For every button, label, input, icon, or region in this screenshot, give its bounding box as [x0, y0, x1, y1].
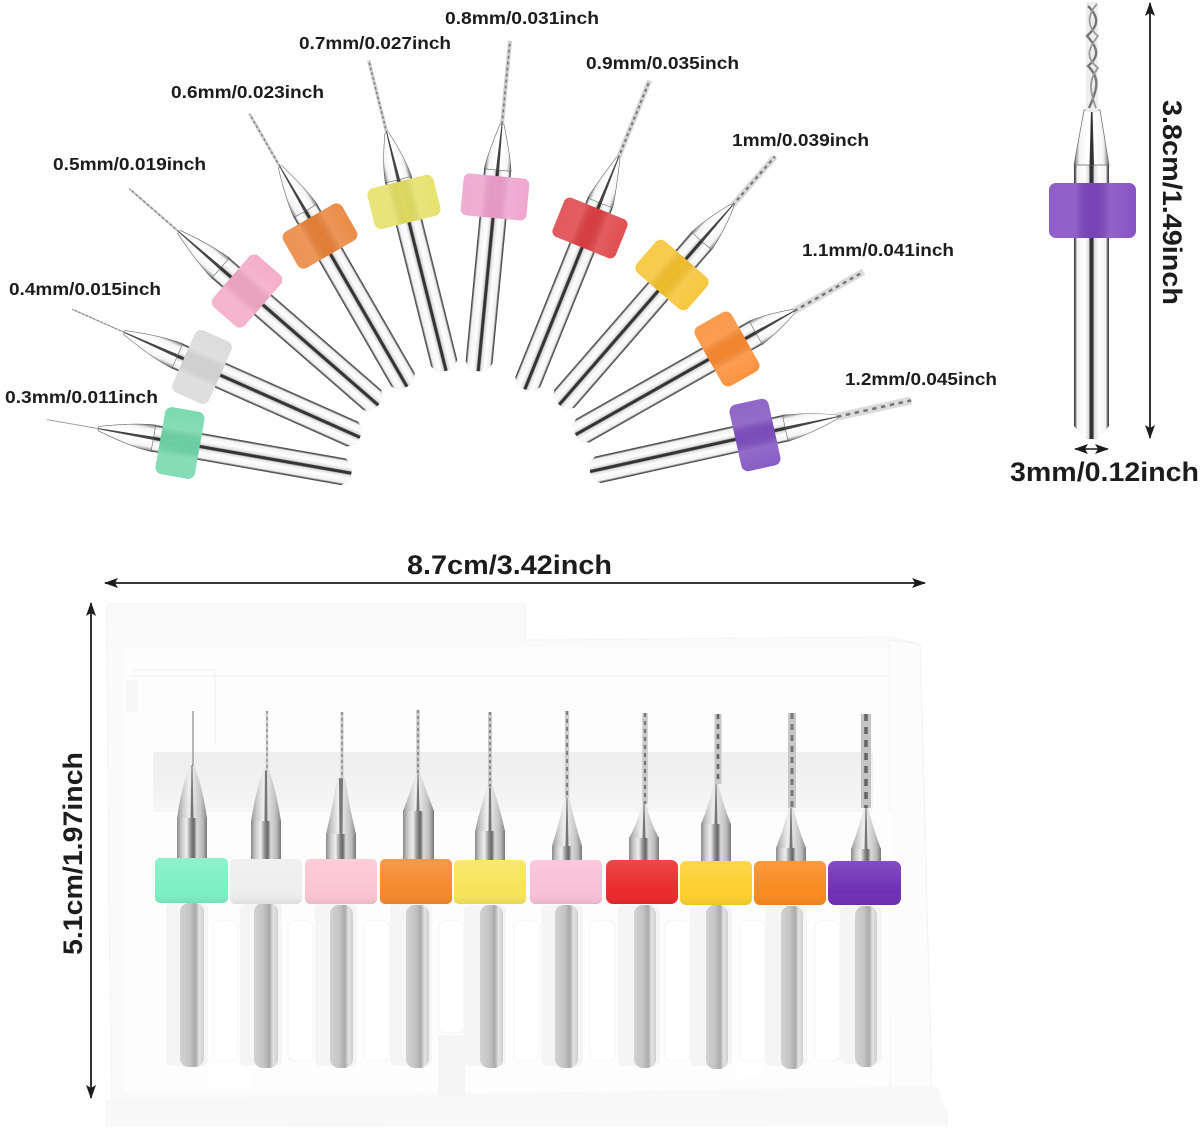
label 0.5mm: 0.5mm/0.019inch	[53, 154, 206, 174]
drill bit 0.3mm mint	[41, 386, 357, 507]
drill bit 0.6mm orange	[220, 97, 436, 404]
dimension arrow: drill length	[1149, 3, 1151, 438]
case drill orange	[380, 710, 452, 1068]
dimension label: case height: 5.1cm/1.97inch	[58, 752, 88, 955]
large purple drill bit	[1049, 2, 1136, 439]
case drill yellow	[454, 712, 526, 1068]
drill bit 1mm yellow	[533, 134, 801, 427]
label 0.8mm: 0.8mm/0.031inch	[445, 8, 599, 28]
drills held in the case	[155, 710, 901, 1069]
case drill pink two	[530, 711, 602, 1068]
drill bit 0.8mm pink	[445, 38, 543, 374]
drill bit 1.2mm purple	[583, 367, 919, 505]
fan of ten drill bits	[41, 38, 919, 507]
drill bit 1.1mm orange	[559, 242, 880, 464]
dimension arrow: shank diameter	[1075, 448, 1108, 450]
dimension arrow: case height	[90, 603, 92, 1098]
case drill mint	[155, 711, 228, 1067]
case drill orange two	[754, 713, 826, 1069]
drill bit 0.4mm white	[58, 278, 374, 468]
dimension arrow: case width	[105, 582, 925, 584]
case drill pink	[305, 712, 377, 1068]
dimension label: drill length: 3.8cm/1.49inch	[1157, 100, 1187, 305]
label 0.7mm: 0.7mm/0.027inch	[299, 33, 451, 53]
size labels for the fan	[5, 8, 997, 407]
drill bit 0.5mm pink	[107, 163, 401, 431]
label 1.2mm: 1.2mm/0.045inch	[845, 369, 997, 389]
dimension label: case width: 8.7cm/3.42inch	[407, 550, 612, 580]
case drill white	[230, 711, 302, 1068]
drill bit 0.9mm red	[493, 68, 681, 402]
label 0.4mm: 0.4mm/0.015inch	[9, 279, 161, 299]
case drill red	[606, 713, 678, 1068]
dimension label: shank diameter: 3mm/0.12inch	[1010, 457, 1199, 487]
drill bit 0.7mm yellow	[336, 52, 479, 379]
label 1mm: 1mm/0.039inch	[732, 130, 869, 150]
case drill purple	[828, 714, 901, 1067]
label 0.6mm: 0.6mm/0.023inch	[171, 82, 324, 102]
white slots moulded in the case	[213, 921, 840, 1061]
label 0.9mm: 0.9mm/0.035inch	[586, 53, 739, 73]
clear plastic storage case	[105, 604, 948, 1127]
case drill golden yellow	[680, 714, 752, 1069]
label 1.1mm: 1.1mm/0.041inch	[802, 240, 954, 260]
label 0.3mm: 0.3mm/0.011inch	[5, 387, 158, 407]
